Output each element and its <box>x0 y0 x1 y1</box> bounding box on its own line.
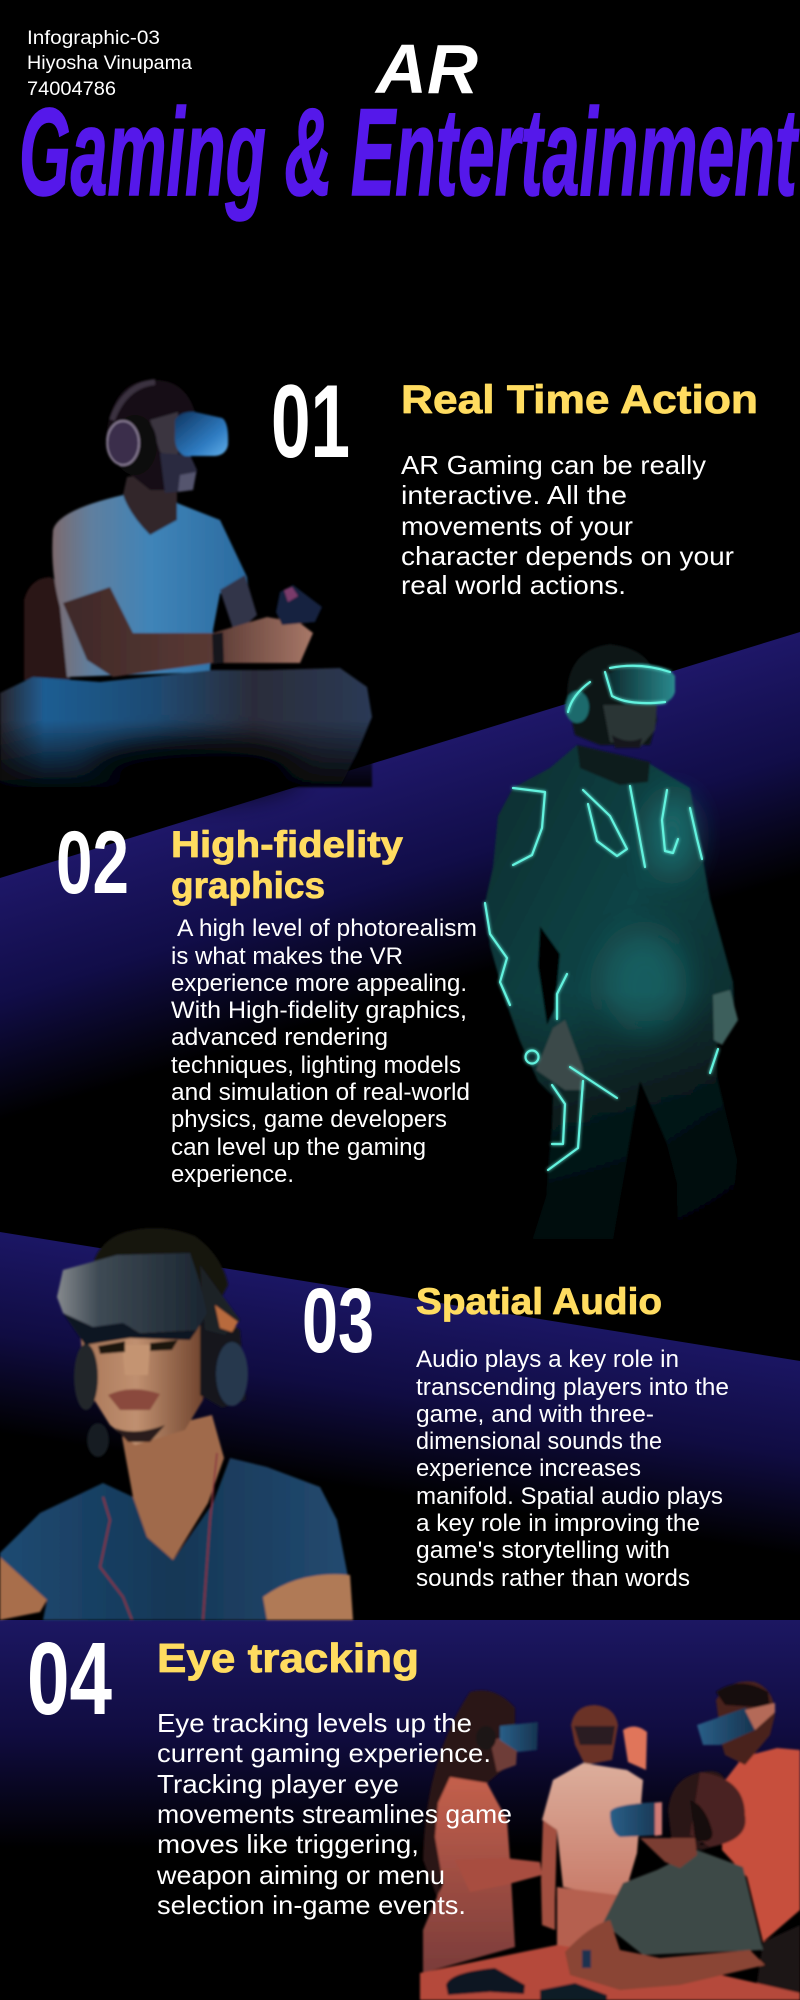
section 03: body text: game's storytelling with <box>416 1537 670 1564</box>
section 03: body text: sounds rather than words <box>416 1565 690 1592</box>
section 04: body text: selection in-game events. <box>157 1890 466 1920</box>
section 02: number: 02 <box>56 812 129 912</box>
panel background: section 03 diagonal band <box>0 1232 800 1620</box>
section 02: body text: is what makes the VR <box>171 943 403 970</box>
section 04: number: 04 <box>27 1621 112 1736</box>
section 03: heading: Spatial Audio <box>416 1281 662 1322</box>
credit text block: 74004786 <box>27 79 116 100</box>
section 03: body text: a key role in improving the <box>416 1510 700 1537</box>
section 01: heading: Real Time Action <box>401 378 758 422</box>
section 02: body text: advanced rendering <box>171 1024 388 1051</box>
credit text block <box>27 28 192 100</box>
section 03: body text: Audio plays a key role in <box>416 1346 679 1373</box>
section 03: body text: game, and with three- <box>416 1401 654 1428</box>
panel background: section 02 diagonal band <box>0 632 800 1240</box>
section 04: body text <box>156 1708 512 1920</box>
section 01: number: 01 <box>271 364 350 480</box>
section 01: body text: movements of your <box>401 511 633 541</box>
panel background: section 04 band <box>0 1620 800 2000</box>
illustration: seated player with blue VR headset <box>0 380 372 798</box>
section 01: body text: AR Gaming can be really <box>401 450 706 480</box>
section 02: body text: techniques, lighting models <box>171 1052 461 1079</box>
section 04: body text: Tracking player eye <box>157 1769 399 1799</box>
title: AR <box>374 30 478 108</box>
section 04: body text: Eye tracking levels up the <box>157 1708 472 1738</box>
section 02: body text: physics, game developers <box>171 1106 447 1133</box>
section 01: body text <box>401 450 734 600</box>
section 04: heading: Eye tracking <box>157 1635 419 1681</box>
section 03: body text: experience increases <box>416 1455 641 1482</box>
section 03: body text <box>416 1346 729 1592</box>
section 03: body text: dimensional sounds the <box>416 1428 662 1455</box>
section 02: body text: With High-fidelity graphics, <box>171 997 467 1024</box>
section 02: body text: and simulation of real-world <box>171 1079 470 1106</box>
illustration: man in neon teal suit with VR headset <box>485 644 738 1239</box>
section 01: body text: character depends on your <box>401 541 734 571</box>
section 01: body text: interactive. All the <box>401 480 627 510</box>
credit text block: Hiyosha Vinupama <box>27 53 192 74</box>
section 01: body text: real world actions. <box>401 570 626 600</box>
section 03: number: 03 <box>302 1270 374 1372</box>
section 04: body text: current gaming experience. <box>157 1738 491 1768</box>
section 02: body text: A high level of photorealism <box>177 915 477 942</box>
section 02: body text: experience more appealing. <box>171 970 467 997</box>
section 02: heading: graphics <box>171 865 325 906</box>
section 04: body text: movements streamlines game <box>157 1799 512 1829</box>
section 03: body text: manifold. Spatial audio plays <box>416 1483 723 1510</box>
illustration: young man with headset and headphones <box>0 1228 353 1620</box>
section 04: body text: weapon aiming or menu <box>156 1860 445 1890</box>
section 03: body text: transcending players into the <box>416 1374 729 1401</box>
credit text block: Infographic-03 <box>27 28 160 49</box>
illustration: group of four players in red light <box>420 1681 800 2000</box>
section 02: body text: experience. <box>171 1161 294 1188</box>
section 02: heading: High-fidelity <box>171 824 403 865</box>
section 02: body text <box>171 915 477 1188</box>
section 02: heading <box>171 824 403 906</box>
section 02: body text: can level up the gaming <box>171 1134 426 1161</box>
section 04: body text: moves like triggering, <box>157 1829 419 1859</box>
